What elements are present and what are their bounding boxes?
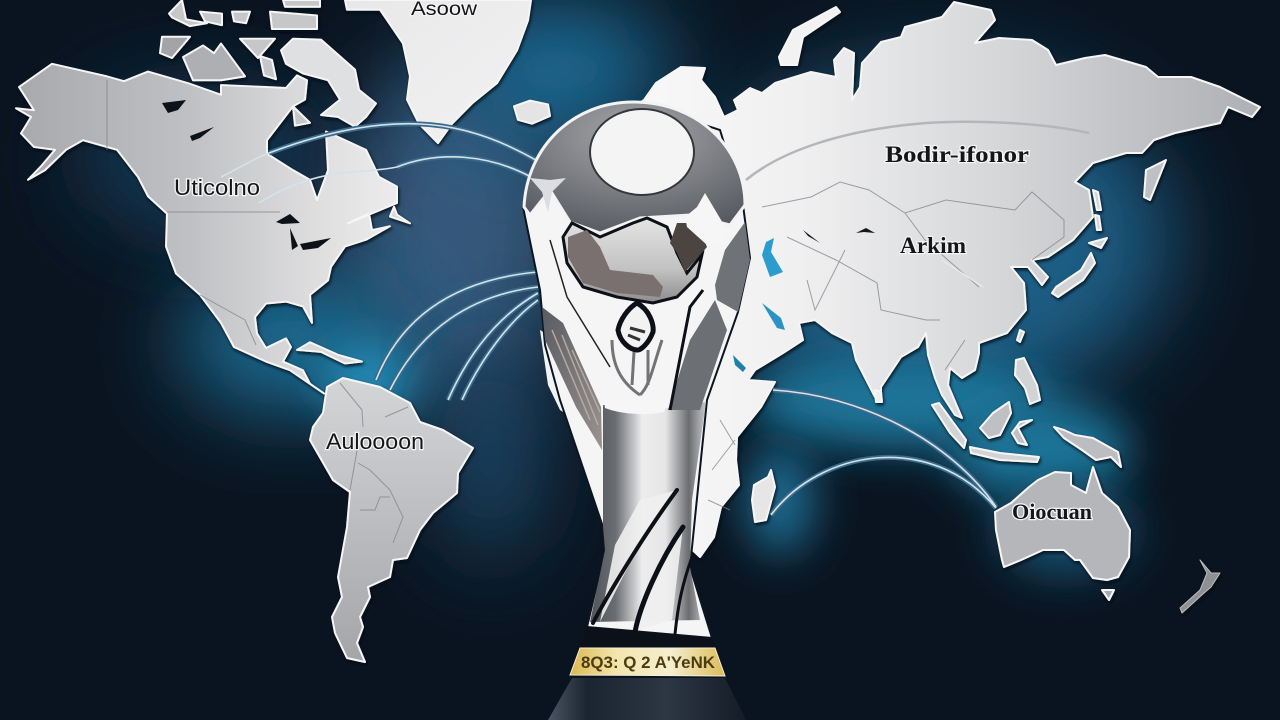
flight arcs: trophy to continents (221, 122, 1089, 515)
Sulawesi (1012, 420, 1032, 445)
white cap (685, 193, 727, 245)
trophy body (523, 104, 750, 638)
Japan (1052, 253, 1095, 297)
Banks Island (160, 37, 190, 58)
trophy base (548, 627, 746, 720)
Tasmania (1102, 590, 1114, 600)
blue glow behind map (80, 0, 1170, 575)
label: Europe: Bodir-ifonor (885, 142, 1029, 167)
Borneo (980, 402, 1011, 438)
small Africa sliver left of trophy (540, 330, 575, 420)
lakes and seas (162, 100, 875, 372)
gold band (570, 648, 725, 676)
land borders (107, 80, 1064, 543)
star cross (530, 178, 566, 212)
Caspian Sea (762, 238, 783, 277)
continent: North America (16, 64, 397, 393)
Hokkaido and Kurils (1089, 190, 1107, 248)
continent: Greenland (345, 0, 531, 143)
Java (970, 447, 1039, 462)
Sumatra (932, 403, 966, 448)
Central Asian marks (803, 228, 875, 243)
label: Asia: Arkim (900, 233, 966, 258)
Novaya Zemlya (779, 7, 840, 65)
base inscription: 8Q3: Q 2 A'YeNK (581, 653, 716, 672)
Taiwan and Philippines (1015, 330, 1040, 404)
bowl shadow (568, 230, 663, 297)
white stem ribbons (600, 490, 683, 630)
globe highlight (590, 109, 694, 195)
Vancouver and Newfoundland (390, 207, 410, 223)
New Guinea (1054, 427, 1121, 467)
dark arc bands (269, 124, 996, 515)
continent: Australia (995, 467, 1130, 580)
left contour (550, 240, 610, 367)
right figure arm (715, 222, 750, 312)
base collar (578, 627, 717, 650)
dark detail (670, 223, 707, 272)
globe (524, 102, 745, 233)
trophy stem (590, 402, 706, 622)
Red Sea (733, 355, 746, 372)
bowl (563, 218, 703, 303)
arc across Asia (746, 122, 1089, 180)
continent: South America (310, 378, 473, 662)
Sakhalin (1144, 160, 1166, 200)
label: North America: Uticolno (174, 175, 260, 200)
light arc lines (221, 124, 996, 515)
base lower (548, 678, 746, 720)
continent: Eurasia and Africa (600, 2, 1260, 557)
New Zealand (1180, 560, 1220, 613)
stem dark ribbons (593, 490, 692, 634)
label: South America: Auloooon (326, 429, 424, 454)
left figure drape (542, 307, 602, 450)
central medallion (618, 303, 653, 350)
Baffin Island (281, 39, 376, 127)
Cuba (297, 342, 362, 363)
label: Oceania: Oiocuan (1012, 499, 1092, 524)
Persian Gulf (762, 303, 785, 330)
trophy (523, 102, 750, 638)
Victoria Island (183, 44, 245, 80)
North American lakes (162, 100, 331, 250)
upper Arctic islands (169, 0, 320, 126)
panel edge (670, 290, 703, 410)
stem collar (604, 400, 668, 414)
Madagascar (752, 470, 775, 522)
Sri Lanka (875, 390, 882, 402)
body shadow lines (612, 340, 662, 395)
Iceland (514, 101, 550, 124)
lower gray panel (668, 300, 727, 410)
